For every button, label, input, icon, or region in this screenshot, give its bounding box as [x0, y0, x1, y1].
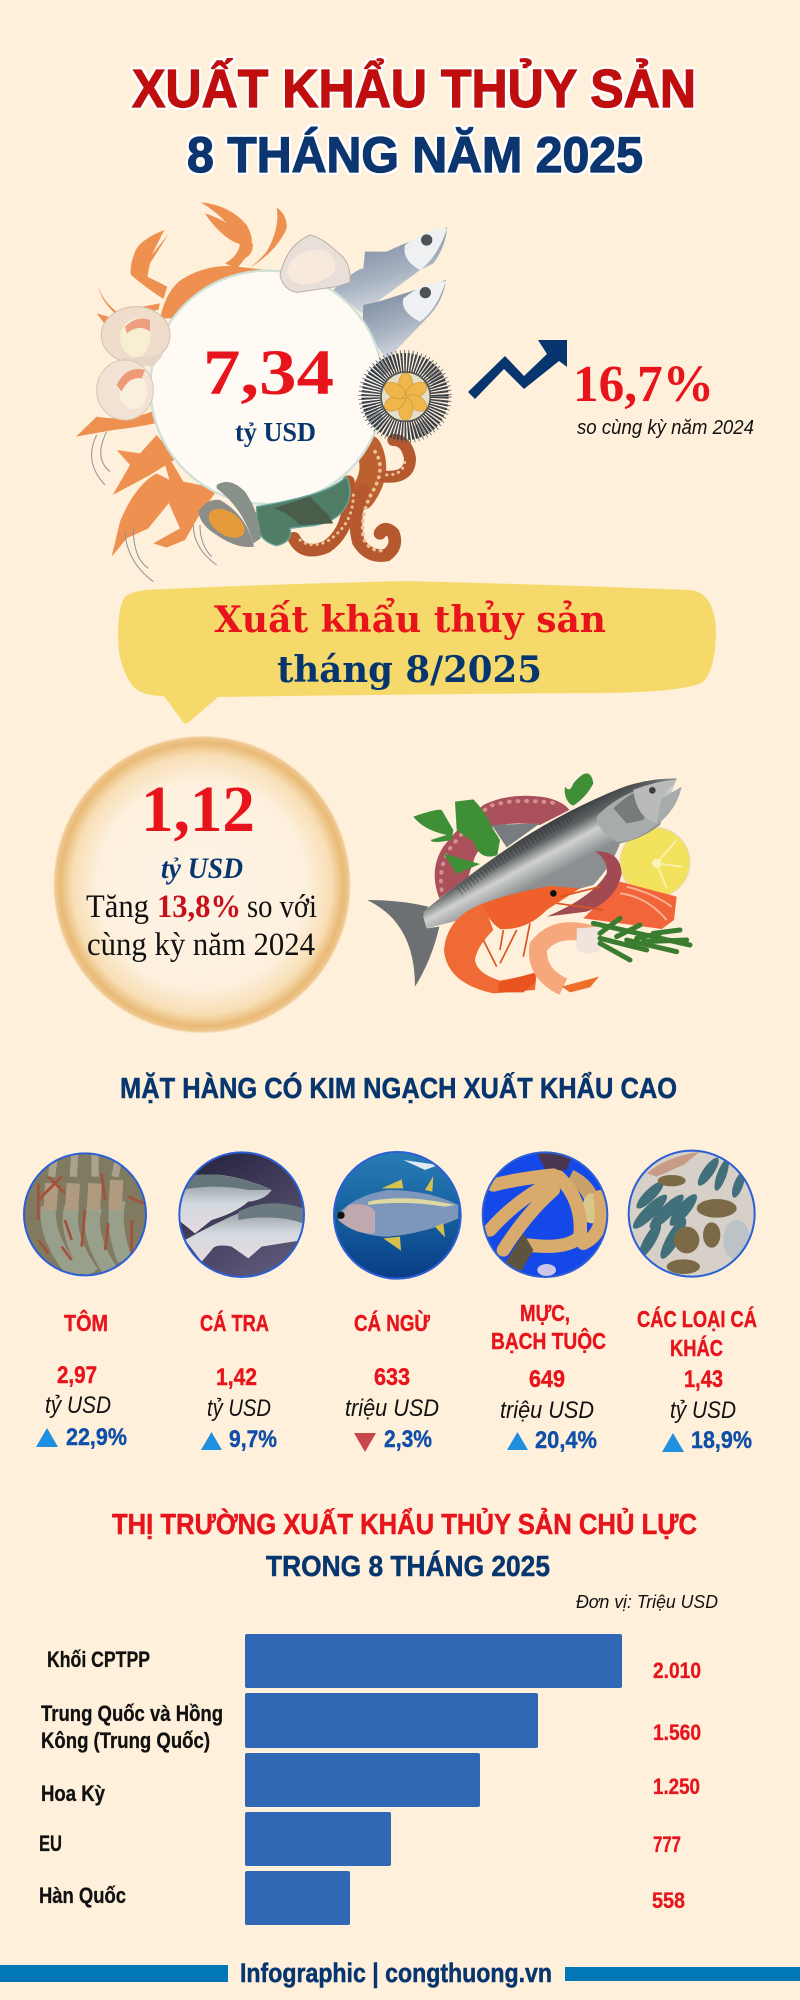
growth indicator	[468, 340, 754, 439]
octopus	[294, 440, 410, 556]
photo: octopus	[482, 1152, 608, 1278]
mackerel	[333, 227, 447, 313]
photo: pangasius	[178, 1152, 305, 1278]
product: shrimp	[22, 1150, 148, 1451]
speech bubble heading: Xuất khẩu thủy sản	[214, 599, 606, 641]
bar: South Korea: 558	[652, 1888, 685, 1913]
name: CÁC LOẠI CÁ	[637, 1305, 757, 1332]
change: 2,3%	[384, 1426, 432, 1453]
bar: EU: EU	[39, 1831, 62, 1856]
unit: tỷ USD	[45, 1392, 111, 1419]
product: other fish	[627, 1150, 757, 1454]
octopus behind	[435, 796, 569, 898]
name: CÁ NGỪ	[354, 1309, 431, 1336]
rosemary	[593, 918, 690, 960]
growth percent: 16,7%	[573, 356, 714, 413]
icon: up triangle	[507, 1432, 528, 1450]
center disc	[150, 271, 384, 504]
unit note: Đơn vị: Triệu USD	[576, 1592, 718, 1612]
illustration: seafood wreath	[76, 202, 447, 582]
heading: key export markets: TRONG 8 THÁNG 2025	[266, 1549, 550, 1583]
product: other fish: KHÁC	[670, 1334, 723, 1361]
value: 1,42	[216, 1364, 257, 1391]
bar: China and Hong Kong: Kông (Trung Quốc)	[41, 1728, 210, 1753]
unit: triệu USD	[345, 1395, 439, 1422]
speech bubble heading: tháng 8/2025	[277, 649, 542, 691]
bar: South Korea: Hàn Quốc	[39, 1883, 126, 1908]
bar: China and Hong Kong: Trung Quốc và Hồng	[41, 1701, 223, 1726]
title: 8 THÁNG NĂM 2025	[187, 127, 643, 183]
monthly value circle: 13,8%	[157, 889, 241, 925]
change: 22,9%	[66, 1424, 127, 1451]
footer	[0, 1958, 800, 1988]
monthly value circle: Tăng	[86, 889, 149, 925]
bar: China and Hong Kong: 1.560	[653, 1720, 701, 1745]
monthly value circle: tỷ USD	[161, 852, 243, 885]
bar: United States: 1.250	[653, 1774, 700, 1799]
name: TÔM	[64, 1309, 108, 1336]
bar: United States	[41, 1753, 700, 1807]
footer: Infographic | congthuong.vn	[240, 1958, 552, 1988]
bar chart: markets	[39, 1634, 701, 1925]
product: pangasius	[178, 1152, 305, 1453]
oyster	[280, 235, 350, 292]
icon: down triangle	[354, 1433, 376, 1452]
photo: mixed fish	[627, 1150, 757, 1278]
big prawn	[444, 903, 537, 993]
title	[132, 59, 696, 183]
bar: China and Hong Kong	[41, 1693, 701, 1753]
total value figure: 7,34	[203, 337, 334, 409]
bar: South Korea	[39, 1871, 685, 1925]
heading: key export markets	[112, 1507, 697, 1583]
icon: rising arrow	[468, 340, 567, 399]
name: MỰC,	[520, 1300, 570, 1326]
urchin	[372, 363, 438, 430]
mussels	[257, 477, 350, 546]
photo: tuna	[333, 1152, 462, 1280]
change: 20,4%	[535, 1427, 597, 1454]
value: 633	[374, 1364, 410, 1391]
peeled prawn	[538, 931, 593, 987]
title: XUẤT KHẨU THỦY SẢN	[132, 59, 696, 119]
change: 18,9%	[691, 1427, 752, 1454]
monthly value circle: cùng kỳ năm 2024	[87, 927, 315, 963]
monthly value circle: so với	[247, 889, 317, 925]
value: 649	[529, 1366, 565, 1393]
bar: EU	[39, 1812, 681, 1866]
icon: up triangle	[201, 1432, 222, 1450]
value: 2,97	[57, 1362, 97, 1389]
change: 9,7%	[229, 1426, 277, 1453]
illustration: salmon, prawns, lemon and herbs	[367, 773, 690, 993]
heading: high-value products: MẶT HÀNG CÓ KIM NGẠCH XUẤT KHẨU CAO	[120, 1071, 677, 1105]
bar: CPTPP	[47, 1634, 701, 1688]
bar: CPTPP: 2.010	[653, 1658, 701, 1683]
icon: up triangle	[662, 1433, 684, 1452]
name: CÁ TRA	[200, 1309, 269, 1336]
growth comparison note: so cùng kỳ năm 2024	[577, 417, 754, 439]
salmon body	[367, 900, 439, 987]
icon: up triangle	[36, 1428, 58, 1447]
bar: EU: 777	[653, 1832, 681, 1857]
product: tuna	[333, 1152, 462, 1453]
bar: United States: Hoa Kỳ	[41, 1781, 106, 1806]
heading: key export markets: THỊ TRƯỜNG XUẤT KHẨU THỦY SẢN CHỦ LỰC	[112, 1507, 697, 1541]
total value unit: tỷ USD	[235, 417, 316, 447]
lemon	[620, 828, 690, 897]
speech bubble heading	[118, 581, 716, 724]
leaves	[413, 773, 593, 874]
product: squid and octopus	[482, 1152, 608, 1454]
unit: tỷ USD	[207, 1395, 271, 1422]
value: 1,43	[684, 1366, 723, 1393]
seafood ring illustration with total value	[76, 202, 447, 582]
scallops	[101, 307, 170, 363]
product: squid and octopus: BẠCH TUỘC	[491, 1327, 606, 1354]
tentacle	[547, 852, 622, 917]
monthly value circle: 1,12	[141, 773, 255, 846]
unit: triệu USD	[500, 1397, 594, 1424]
monthly value circle	[53, 736, 351, 1034]
salmon steak	[583, 882, 677, 929]
photo: shrimp	[22, 1150, 148, 1278]
bar: CPTPP: Khối CPTPP	[47, 1647, 150, 1672]
unit: tỷ USD	[670, 1397, 736, 1424]
